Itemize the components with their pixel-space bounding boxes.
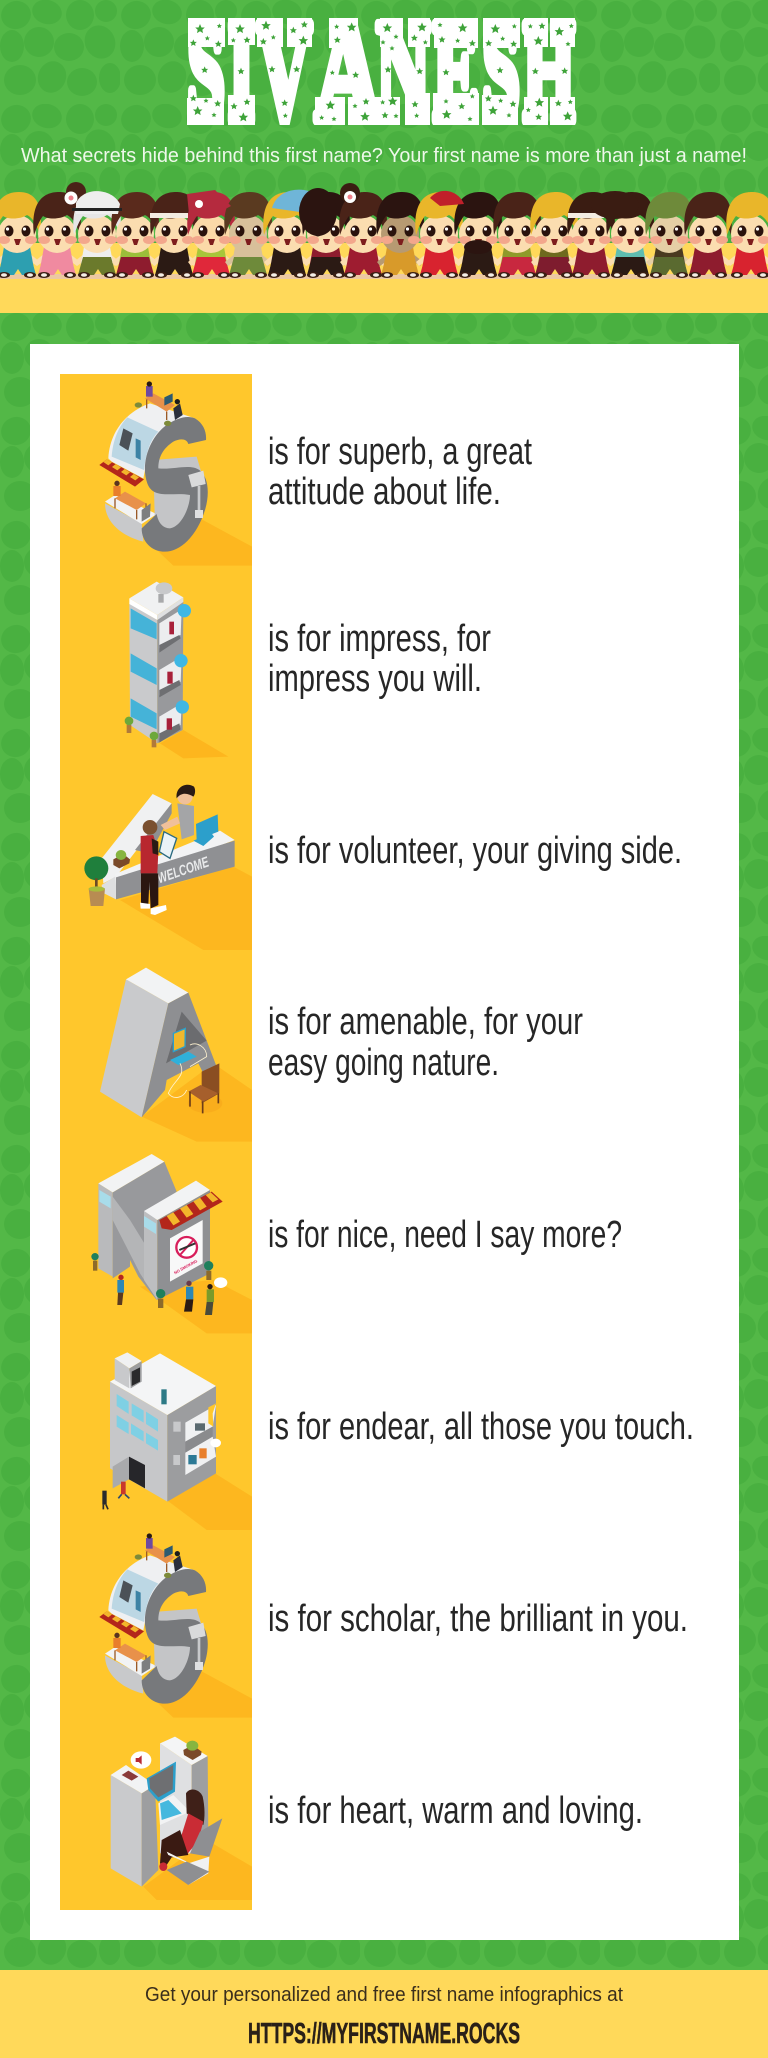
icon: letter E building [102,1352,252,1530]
icon: letter A with chair [100,968,252,1142]
no smoking label: NO SMOKING [173,1258,198,1275]
line S: is for superb, a great [268,431,532,473]
line A: is for amenable, for your [268,1001,583,1043]
icon: letter V welcome desk [84,785,252,950]
icon: second letter S building [99,1533,252,1718]
title: SIVANESH [187,18,576,125]
footer text: Get your personalized and free first name infographics at [145,1984,623,2006]
parade of cartoon characters [0,192,768,278]
yellow illustration strip [60,374,252,1910]
character hats, buns and flowers [64,182,639,254]
line A: easy going nature. [268,1042,499,1084]
line N: is for nice, need I say more? [268,1214,622,1256]
icon: letter I tower [125,582,228,758]
footer url: HTTPS://MYFIRSTNAME.ROCKS [248,2018,520,2050]
letter lines [268,431,694,1832]
icon: letter H desk with woman [111,1737,252,1900]
line S: attitude about life. [268,471,501,513]
floor line under characters [0,274,768,279]
line I: is for impress, for [268,618,491,660]
icon: letter N with awning [91,1154,252,1333]
main white panel [30,344,739,1940]
footer band [0,1970,768,2058]
yellow banner band [0,243,768,313]
line H: is for heart, warm and loving. [268,1790,643,1832]
welcome sign: WELCOME [155,854,212,887]
icon: letter S building [99,381,252,566]
line I: impress you will. [268,658,482,700]
subtitle: What secrets hide behind this first name? Your first name is more than just a name! [21,145,747,167]
